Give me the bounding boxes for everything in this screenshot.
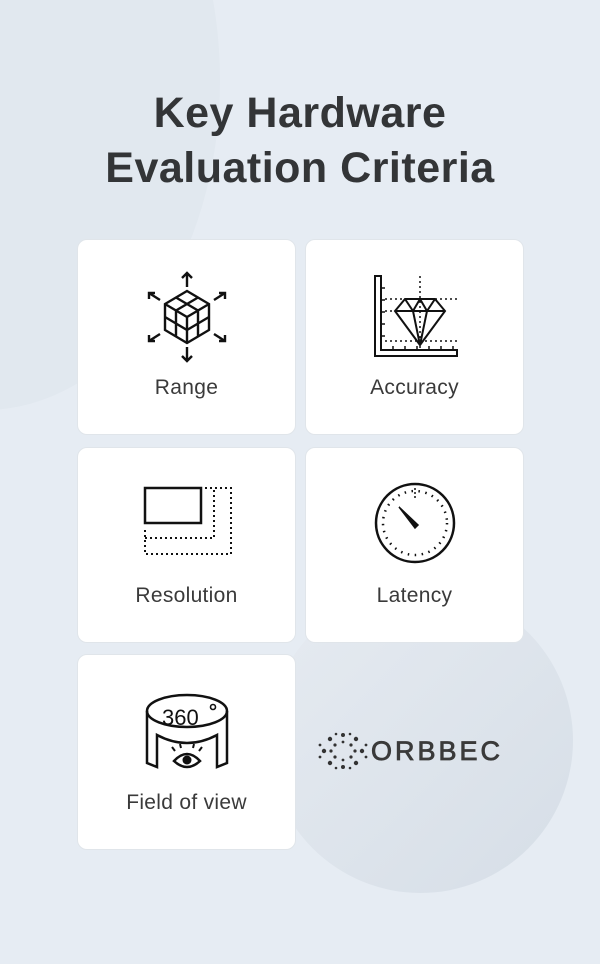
label: Range [155,376,218,399]
icon: diamond ruler [374,275,458,357]
logo: orbbec: ORBBEC [371,736,503,766]
panel: field of view [77,654,296,850]
panel: range [77,239,296,435]
panel: resolution [77,447,296,643]
icon: 360 view [146,694,228,769]
title [105,89,495,192]
title: Key Hardware [154,89,446,137]
title: Evaluation Criteria [105,144,495,192]
panel: accuracy [305,239,524,435]
label: Accuracy [370,376,459,399]
logo: orbbec [318,732,503,770]
icon: cube arrows [148,271,226,363]
icon: gauge [374,482,456,564]
label: Resolution [135,584,238,607]
icon: rectangles [144,486,232,555]
panel: latency [305,447,524,643]
label: Latency [377,584,452,607]
icon: 360 view: 360 [162,705,199,730]
label: Field of view [126,791,247,814]
